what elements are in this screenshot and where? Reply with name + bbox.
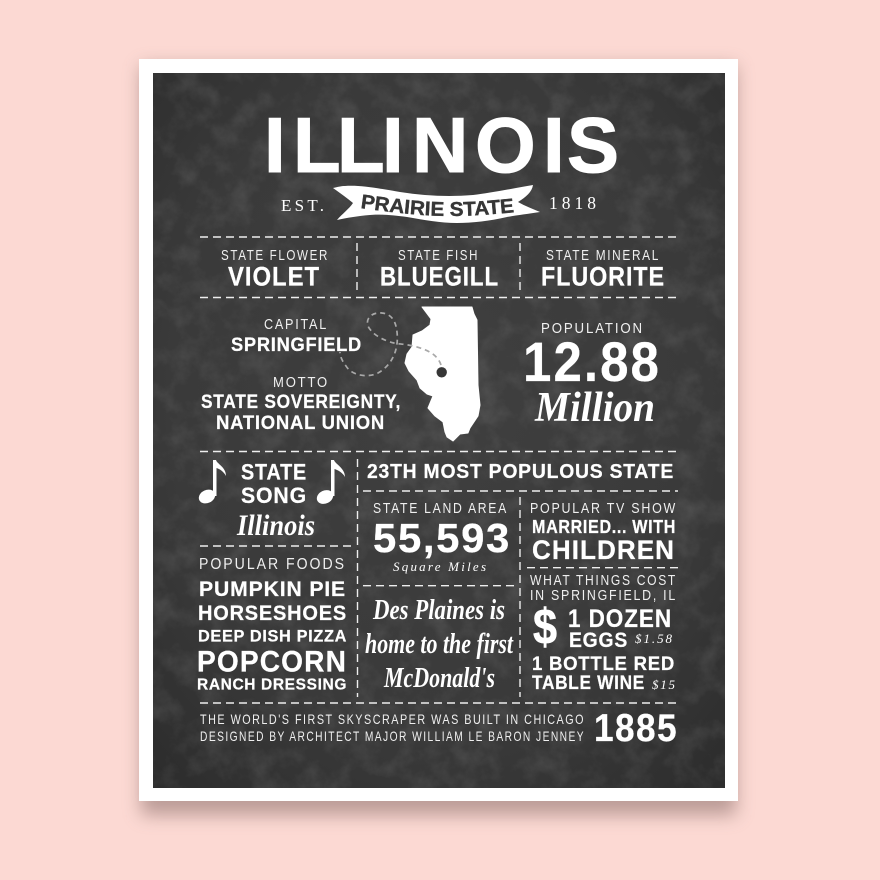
year: 1885 [594, 707, 678, 750]
title line 1: MARRIED... WITH [532, 517, 676, 537]
value line 1: STATE SOVEREIGNTY, [201, 391, 401, 413]
eggs item: 1 DOZEN [568, 605, 672, 633]
value: VIOLET [228, 262, 320, 292]
title: ILLINOIS [264, 101, 619, 189]
panel: cost of things: EGGS [569, 628, 628, 652]
panel: cost of things [530, 573, 677, 694]
icon: right music note [315, 460, 345, 506]
value: SPRINGFIELD [231, 334, 362, 356]
dashed route [340, 313, 441, 376]
panel: state song: SONG [241, 483, 307, 508]
panel: motto [201, 375, 401, 434]
wine item: 1 BOTTLE RED [532, 653, 675, 675]
panel: cost of things: $15 [652, 677, 676, 692]
value line 2: NATIONAL UNION [216, 412, 385, 434]
panel: land area [373, 501, 511, 574]
banner text: PRAIRIE STATE [361, 194, 514, 216]
description: THE WORLD'S FIRST SKYSCRAPER WAS BUILT IN CHICAGO [200, 711, 585, 727]
label: MOTTO [273, 375, 329, 391]
panel: fun fact [365, 594, 514, 694]
panel: capital [231, 317, 362, 356]
panel: population [523, 321, 661, 431]
label: STATE FISH [398, 248, 479, 264]
panel: cost of things: $1.58 [635, 631, 672, 646]
icon: dollar sign: $ [533, 599, 557, 655]
print frame [139, 59, 738, 815]
state silhouette [405, 307, 480, 441]
footer fact: DESIGNED BY ARCHITECT MAJOR WILLIAM LE BARON JENNEY [200, 728, 585, 744]
panel: fun fact: McDonald's [383, 663, 495, 694]
capital marker [436, 367, 447, 377]
unit: Million [534, 385, 655, 431]
est label: EST. [281, 196, 324, 215]
heading: STATE [241, 460, 307, 484]
panel: state song [197, 460, 345, 542]
panel: popular TV show [530, 501, 677, 565]
founding year: 1818 [549, 193, 596, 213]
panel: fun fact: home to the first [365, 629, 514, 660]
label: POPULAR FOODS [199, 556, 346, 573]
label: STATE MINERAL [546, 248, 660, 264]
established line with banner [281, 185, 596, 223]
map: Illinois outline [340, 307, 480, 441]
song name: Illinois [236, 509, 315, 542]
icon: left music note [197, 460, 226, 506]
panel: cost of things: IN SPRINGFIELD, IL [530, 588, 677, 604]
panel: popular foods: HORSESHOES [198, 601, 347, 625]
ribbon banner [333, 185, 540, 223]
label: POPULATION [541, 321, 644, 337]
footer fact [200, 707, 678, 750]
panel: cost of things: TABLE WINE [532, 673, 645, 694]
unit: Square Miles [393, 559, 486, 574]
label: CAPITAL [264, 317, 328, 333]
panel: popular foods: POPCORN [197, 646, 347, 678]
number: 12.88 [523, 330, 661, 393]
label: STATE FLOWER [221, 248, 329, 264]
panel: popular foods: RANCH DRESSING [197, 676, 347, 694]
value: BLUEGILL [380, 262, 499, 292]
label: WHAT THINGS COST [530, 573, 677, 589]
title line 2: CHILDREN [532, 535, 675, 565]
label: STATE LAND AREA [373, 501, 508, 517]
number: 55,593 [373, 515, 511, 561]
panel: fun fact: Des Plaines is [372, 594, 505, 626]
label: POPULAR TV SHOW [530, 501, 677, 517]
value: FLUORITE [541, 262, 665, 292]
panel: popular foods [197, 556, 347, 694]
panel: population rank: 23TH MOST POPULOUS STATE [367, 460, 674, 483]
panel: popular foods: DEEP DISH PIZZA [198, 626, 347, 646]
panel: state fish [380, 248, 499, 292]
food list: PUMPKIN PIE [199, 577, 346, 601]
panel: state flower [221, 248, 329, 292]
panel: state mineral [541, 248, 665, 292]
